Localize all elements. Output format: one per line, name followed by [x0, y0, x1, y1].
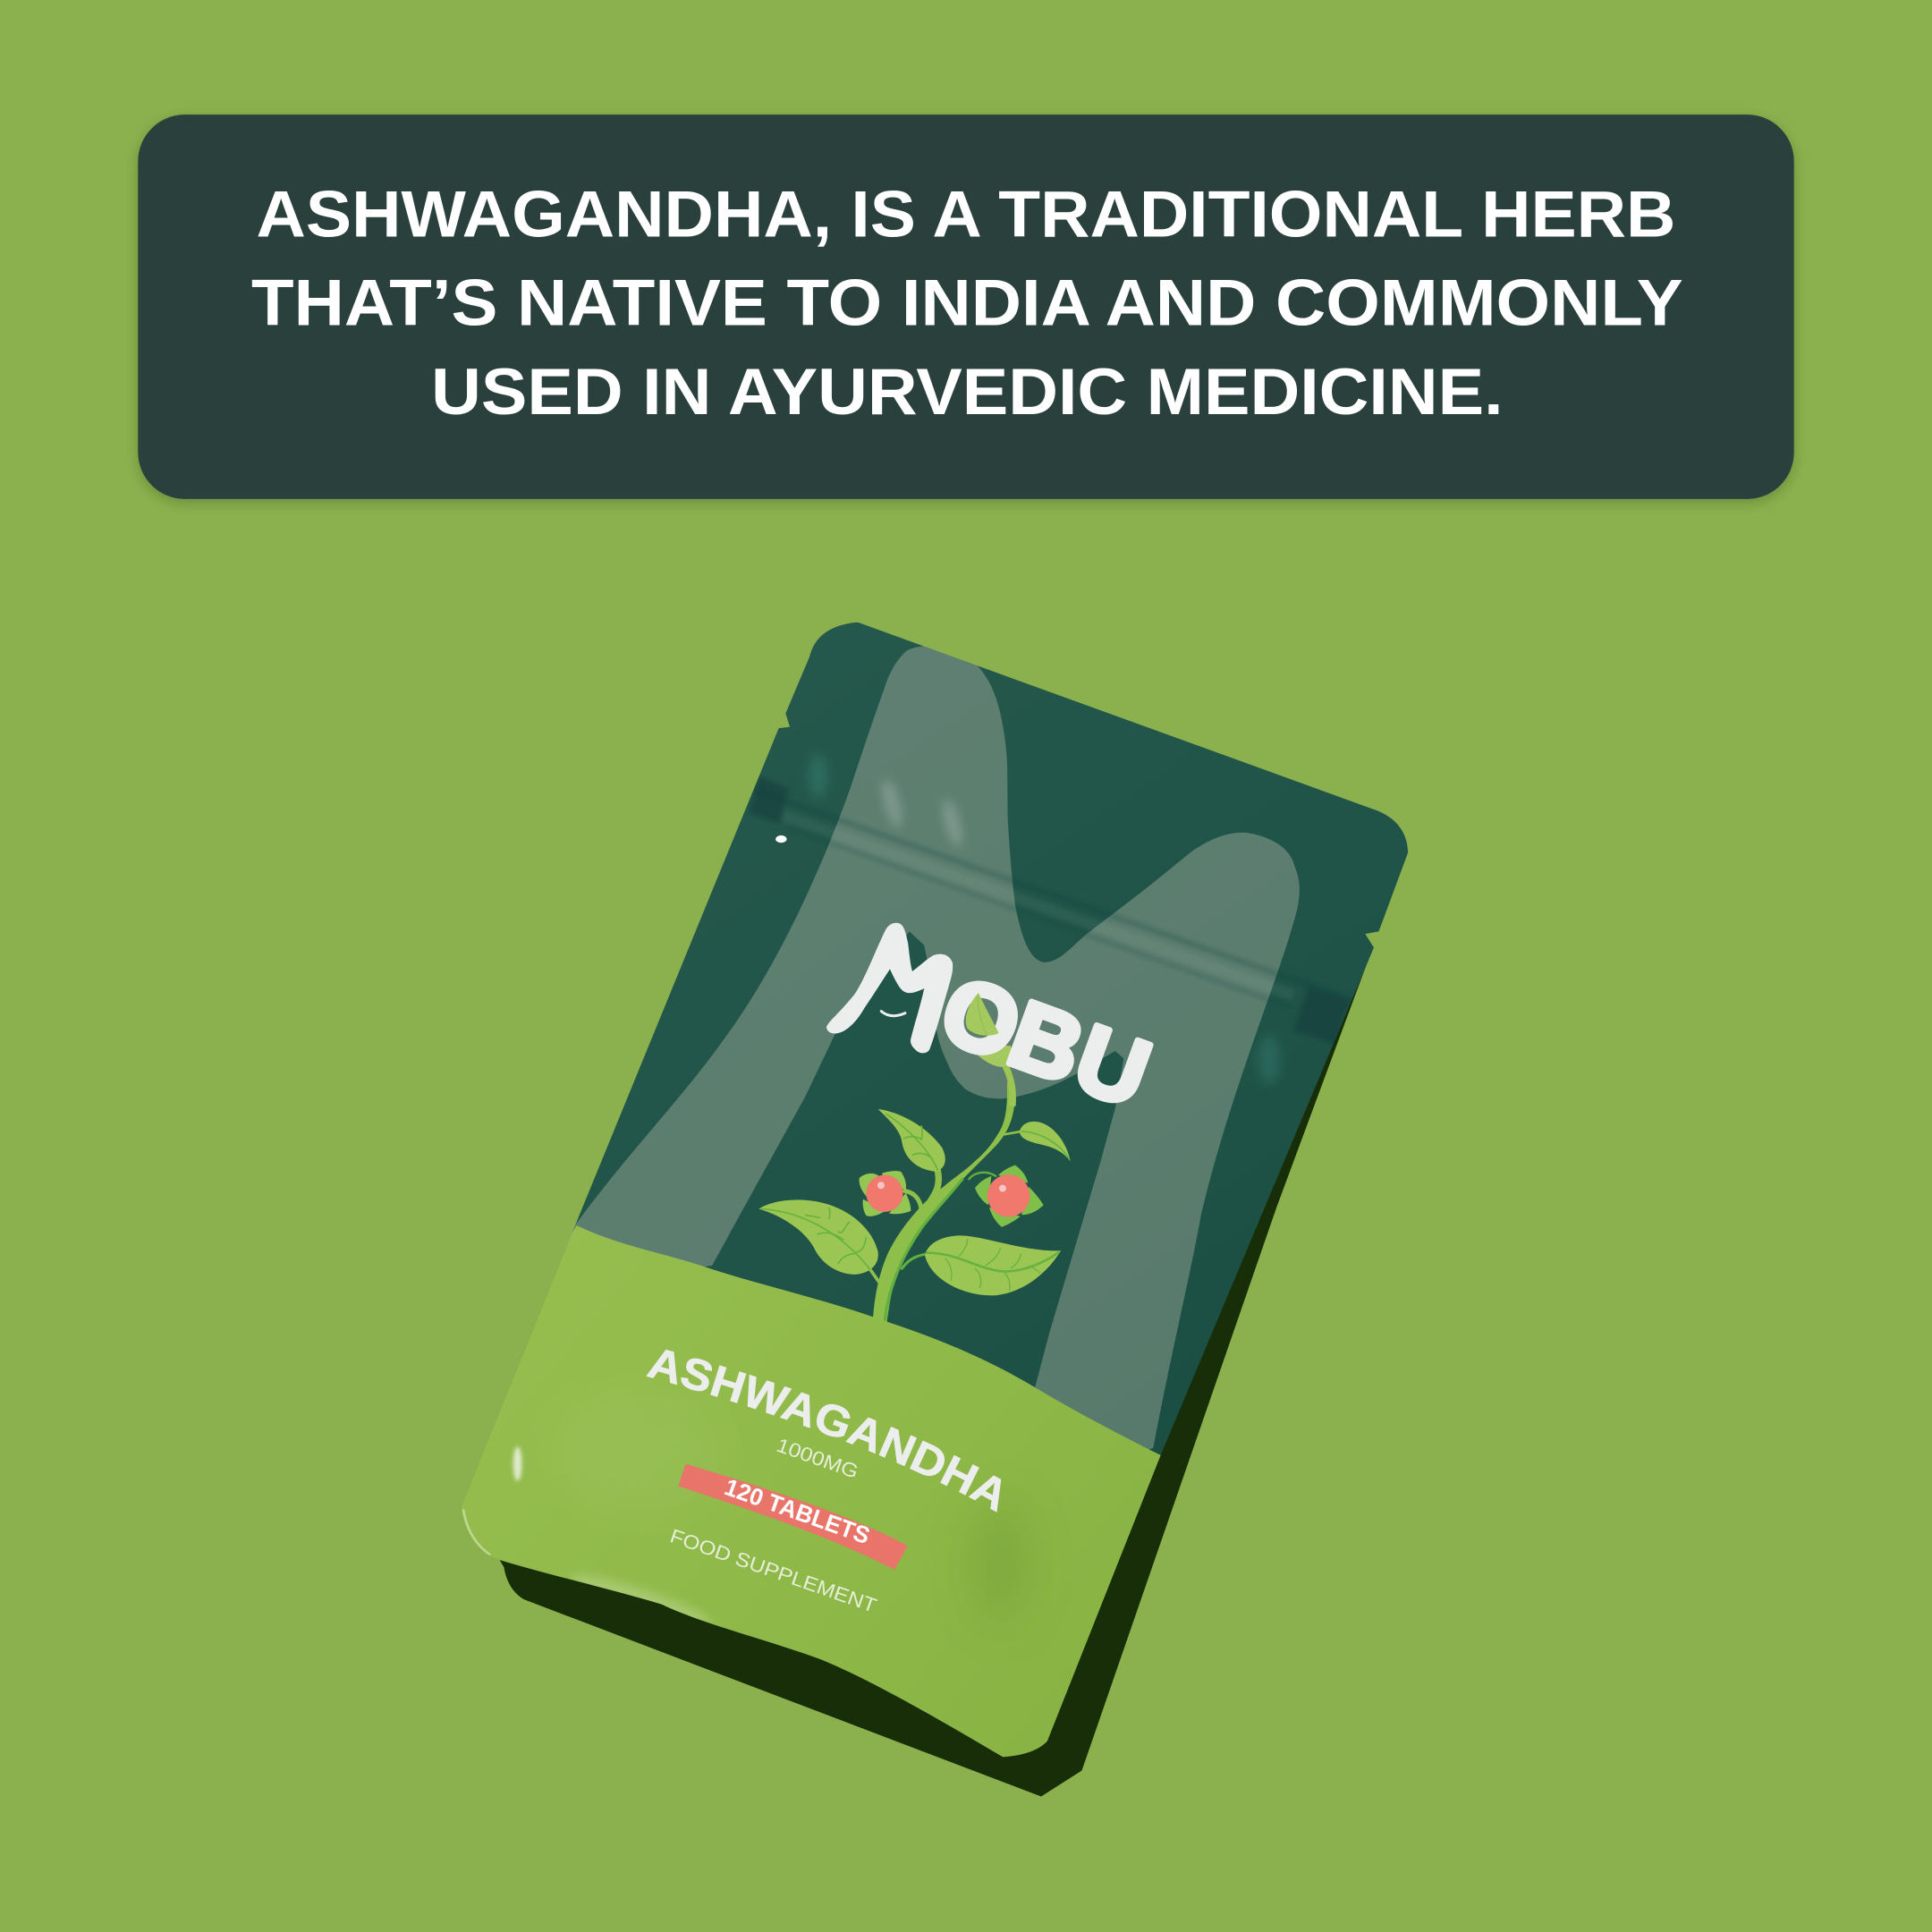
big leaf left — [758, 1199, 878, 1275]
band shading — [462, 1445, 1020, 1623]
banner text — [251, 178, 1683, 428]
big leaf right — [925, 1235, 1061, 1295]
tablets tag: 120 TABLETS — [721, 1473, 874, 1549]
stem behind logo — [1005, 1066, 1013, 1106]
dosage: 1000MG — [774, 1434, 861, 1483]
tablets tag — [678, 1464, 908, 1570]
leaf base under logo — [975, 1044, 1013, 1067]
banner text: THAT’S NATIVE TO INDIA AND COMMONLY — [251, 267, 1683, 340]
zip end patches — [750, 776, 1351, 1045]
plant main stem — [873, 1082, 1015, 1324]
logo letters OBU: B — [996, 979, 1097, 1104]
foil highlights — [775, 754, 1280, 1084]
product name: ASHWAGANDHA — [646, 1349, 1002, 1513]
label text group — [646, 1349, 1002, 1617]
banner text: USED IN AYURVEDIC MEDICINE. — [431, 356, 1504, 428]
right berry — [975, 1165, 1044, 1227]
pouch dark green base — [461, 623, 1408, 1757]
logo: MOBU — [826, 923, 1154, 1106]
plant stem stripe — [885, 1178, 963, 1321]
translucent M shape — [542, 646, 1300, 1466]
leaf upper left — [878, 1109, 945, 1172]
lower green band — [461, 1225, 1161, 1757]
plant illustration — [758, 1082, 1071, 1324]
left berry — [860, 1171, 911, 1216]
zip seal lines — [784, 813, 1293, 1002]
leaf in logo — [966, 993, 999, 1036]
plant side branches — [870, 1131, 1021, 1284]
logo letter M: M — [807, 894, 988, 1086]
logo letters OBU: U — [1062, 1004, 1164, 1128]
logo smile mark — [881, 1012, 905, 1016]
food supplement label: FOOD SUPPLEMENT — [667, 1524, 879, 1617]
infographic canvas — [132, 113, 1800, 1796]
leaf upper right — [1020, 1122, 1071, 1161]
pouch shadow — [492, 955, 1370, 1796]
pouch — [461, 623, 1408, 1757]
banner panel — [138, 114, 1794, 499]
banner text: ASHWAGANDHA, IS A TRADITIONAL HERB — [257, 178, 1675, 250]
logo letters OBU: O — [928, 954, 1034, 1081]
